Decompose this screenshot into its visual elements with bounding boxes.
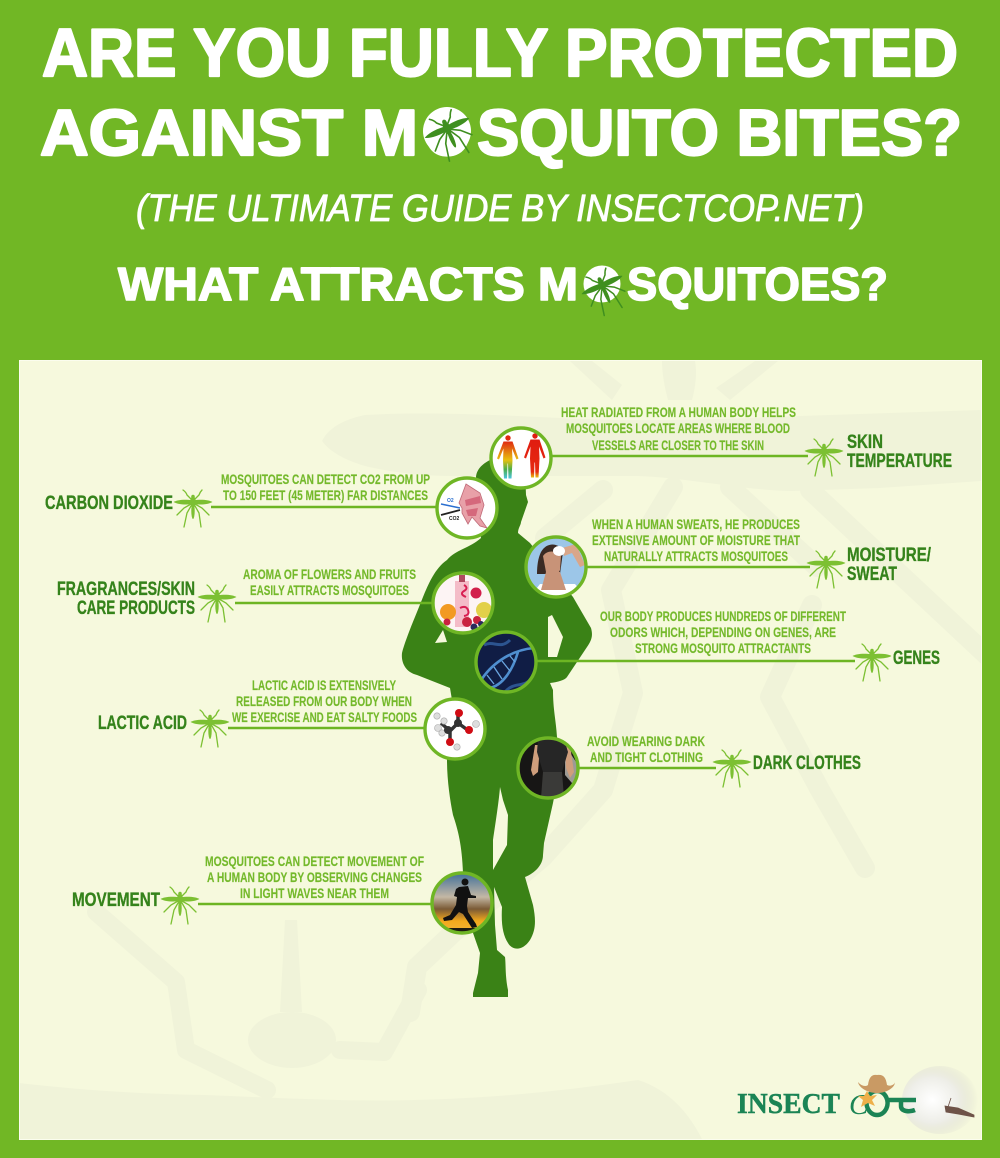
title: SQUITO BITES?: [477, 96, 962, 169]
photo: man in dark clothes: [518, 738, 578, 798]
subtitle: (THE ULTIMATE GUIDE BY INSECTCOP.NET): [136, 188, 864, 230]
logo word: INSECT: [737, 1088, 840, 1120]
title: AGAINST M: [40, 96, 418, 169]
panel: infographic background: [20, 360, 982, 1140]
cowboy hat: [858, 1075, 895, 1093]
description: [592, 517, 801, 564]
description: AVOID WEARING DARK: [587, 734, 705, 749]
description: AND TIGHT CLOTHING: [590, 750, 703, 765]
ring: DNA photo: [476, 632, 536, 692]
silhouette of running man: [402, 455, 592, 997]
label: MOVEMENT: [72, 889, 160, 911]
callout: dark clothes: [518, 734, 861, 798]
label: CARE PRODUCTS: [77, 597, 195, 619]
label: GENES: [893, 647, 940, 669]
photo: perfume and fruits: [433, 573, 493, 633]
icon: nose and throat: [437, 478, 497, 538]
callout: fragrances and skin care products: [57, 567, 493, 633]
description: WE EXERCISE AND EAT SALTY FOODS: [232, 710, 417, 725]
icon: nose and throat: O2: [447, 498, 454, 504]
ring: clothes photo: [518, 738, 578, 798]
icon: mosquito: [198, 585, 236, 622]
icon: mosquito in title letter O: [419, 104, 482, 166]
description: HEAT RADIATED FROM A HUMAN BODY HELPS: [561, 405, 796, 420]
background pattern: large faint mosquitoes: [19, 361, 995, 1139]
description: TO 150 FEET (45 METER) FAR DISTANCES: [223, 488, 428, 503]
icon: mosquito: [806, 551, 846, 588]
photo: runner at sunset: [432, 873, 492, 933]
icon: lactic acid molecule: [425, 699, 485, 759]
title: O: [424, 96, 471, 169]
description: MOSQUITOES CAN DETECT CO2 FROM UP: [221, 472, 430, 487]
heading: what attracts mosquitoes: SQUITOES?: [627, 258, 888, 310]
icon: mosquito: [174, 490, 212, 527]
description: [561, 405, 796, 453]
icon: mosquito in heading letter O: [576, 263, 634, 320]
photo: DNA helix: [476, 632, 536, 692]
label: [847, 544, 931, 585]
label: CARBON DIOXIDE: [45, 492, 173, 514]
label: LACTIC ACID: [98, 712, 187, 734]
description: IN LIGHT WAVES NEAR THEM: [240, 886, 389, 901]
icon: nose and throat: CO2: [449, 516, 460, 522]
photo: woman wiping sweat: [526, 537, 586, 597]
description: VESSELS ARE CLOSER TO THE SKIN: [592, 438, 764, 453]
icon: mosquito: [852, 644, 892, 681]
description: [600, 609, 847, 656]
sheriff star: [858, 1091, 877, 1107]
icon: mosquito: [190, 710, 230, 747]
description: LACTIC ACID IS EXTENSIVELY: [252, 678, 396, 693]
callout: skin temperature: [491, 405, 952, 488]
callout: lactic acid: [98, 678, 485, 759]
description: A HUMAN BODY BY OBSERVING CHANGES: [207, 870, 422, 885]
icon: mosquito: [712, 750, 752, 787]
heading: what attracts mosquitoes: WHAT ATTRACTS M: [118, 258, 578, 310]
description: [232, 678, 417, 725]
label: SWEAT: [847, 563, 897, 585]
description: ODORS WHICH, DEPENDING ON GENES, ARE: [610, 625, 836, 640]
description: RELEASED FROM OUR BODY WHEN: [236, 694, 412, 709]
callout: genes: [476, 609, 940, 692]
title: ARE YOU FULLY PROTECTED: [42, 15, 958, 91]
description: OUR BODY PRODUCES HUNDREDS OF DIFFERENT: [600, 609, 847, 624]
description: NATURALLY ATTRACTS MOSQUITOES: [604, 549, 788, 564]
callout: moisture and sweat: [526, 517, 931, 597]
label: [57, 578, 195, 619]
insect: [945, 1098, 974, 1117]
description: [221, 472, 430, 503]
icon: mosquito: [160, 887, 200, 924]
title: [40, 15, 962, 169]
callout: carbon dioxide: [45, 472, 497, 538]
ring: fragrance photo: [433, 573, 493, 633]
icon: body heat map: [491, 428, 551, 488]
description: AROMA OF FLOWERS AND FRUITS: [243, 567, 416, 582]
label: [847, 431, 952, 472]
logo letter C: C: [849, 1089, 869, 1121]
label: MOISTURE/: [847, 544, 931, 566]
description: STRONG MOSQUITO ATTRACTANTS: [635, 641, 811, 656]
description: [587, 734, 705, 765]
description: EASILY ATTRACTS MOSQUITOES: [250, 583, 409, 598]
description: WHEN A HUMAN SWEATS, HE PRODUCES: [592, 517, 800, 532]
smoke cloud: [902, 1066, 978, 1134]
description: EXTENSIVE AMOUNT OF MOISTURE THAT: [592, 533, 801, 548]
description: [243, 567, 416, 598]
ring: sweat photo: [526, 537, 586, 597]
description: MOSQUITOES CAN DETECT MOVEMENT OF: [205, 854, 424, 869]
label: DARK CLOTHES: [753, 752, 861, 774]
ring: runner photo: [432, 873, 492, 933]
description: [205, 854, 424, 901]
description: MOSQUITOES LOCATE AREAS WHERE BLOOD: [566, 421, 790, 436]
logo: Insect Cop: [737, 1066, 978, 1134]
logo handcuffs: [867, 1091, 916, 1115]
callout: movement: [72, 854, 492, 933]
label: TEMPERATURE: [847, 450, 952, 472]
icon: mosquito: [804, 439, 844, 476]
heading: what attracts mosquitoes: O: [583, 258, 621, 310]
label: SKIN: [847, 431, 883, 453]
label: FRAGRANCES/SKIN: [57, 578, 195, 600]
